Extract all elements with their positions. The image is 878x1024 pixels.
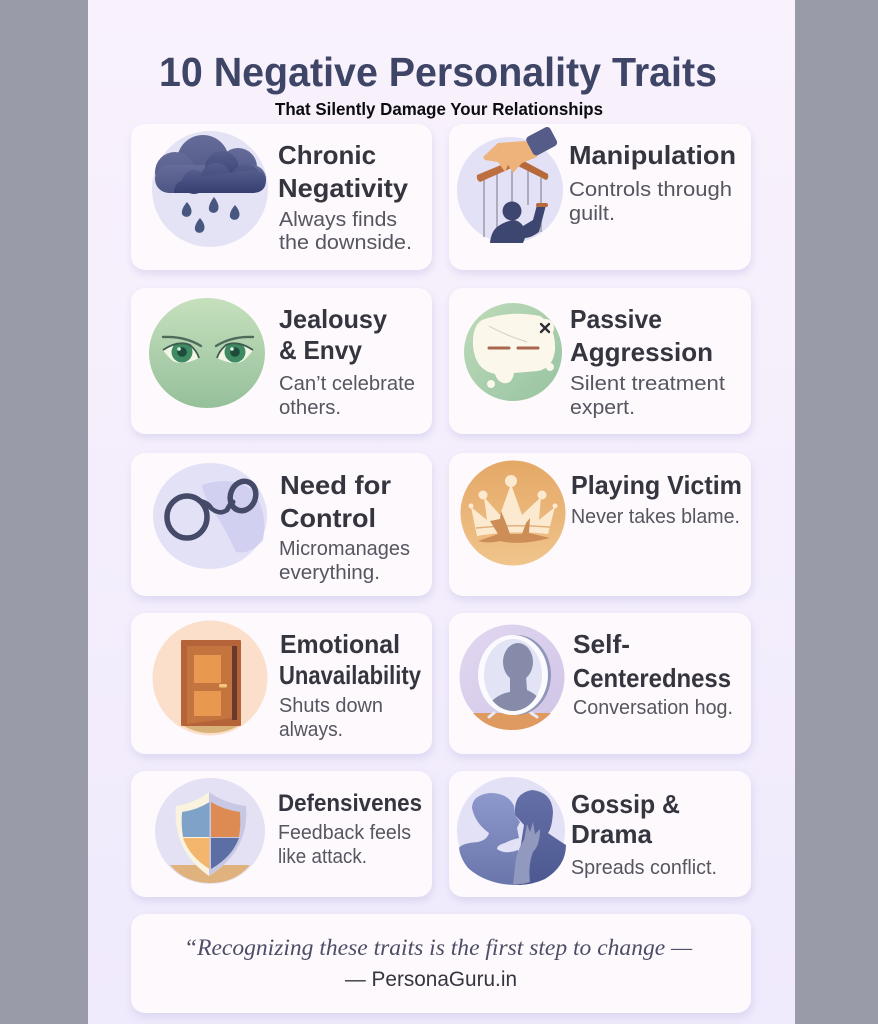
heading: Need for <box>280 470 391 500</box>
description: Silent treatment <box>570 372 725 395</box>
heading: Centeredness <box>573 663 731 693</box>
description <box>570 372 725 419</box>
icon: mirror with silhouette <box>460 624 564 730</box>
heading <box>570 304 713 367</box>
description: others. <box>279 396 341 419</box>
description <box>279 694 383 741</box>
panel: self-centeredness <box>449 613 751 754</box>
icon: closed door <box>152 620 268 736</box>
description: Spreads conflict. <box>571 856 717 879</box>
heading <box>571 789 680 849</box>
icon: shield <box>155 778 265 884</box>
description: Never takes blame. <box>571 505 740 528</box>
description: Micromanages <box>279 537 410 560</box>
heading: Jealousy <box>279 304 388 334</box>
heading: Defensivenes <box>278 790 422 817</box>
heading: Manipulation <box>569 140 736 170</box>
heading <box>279 304 388 365</box>
card <box>131 613 432 754</box>
description <box>279 208 412 254</box>
heading: Control <box>280 503 376 533</box>
description <box>569 178 732 225</box>
description: guilt. <box>569 202 615 225</box>
icon: puppet strings <box>457 126 563 243</box>
description: everything. <box>279 561 380 584</box>
card <box>131 288 432 434</box>
heading: Negativity <box>278 173 409 203</box>
panel: emotional unavailability <box>131 613 432 754</box>
heading: Passive <box>570 304 662 334</box>
icon: broken crown <box>460 460 566 566</box>
panel: jealousy and envy <box>131 288 432 434</box>
heading: Self- <box>573 629 630 659</box>
description: Controls through <box>569 178 732 201</box>
panel: playing victim <box>449 453 751 596</box>
description: Always finds <box>279 208 397 231</box>
card <box>449 613 751 754</box>
panel: gossip and drama <box>449 771 751 897</box>
panel: manipulation <box>449 124 751 270</box>
heading <box>280 470 391 533</box>
description: always. <box>279 718 343 741</box>
card <box>449 288 751 434</box>
heading <box>279 629 421 690</box>
panel: closing quote <box>131 914 751 1013</box>
icon: envious green eyes <box>149 298 265 408</box>
description <box>279 372 415 419</box>
panel: need for control <box>131 453 432 596</box>
heading: Playing Victim <box>571 470 742 500</box>
description: like attack. <box>278 845 367 868</box>
card <box>131 453 432 596</box>
icon: silent speech bubble <box>464 303 562 401</box>
card <box>449 771 751 897</box>
panel: passive aggression <box>449 288 751 434</box>
icon: two silhouettes whispering <box>457 777 566 885</box>
panel: chronic negativity <box>131 124 432 270</box>
heading: Drama <box>571 819 653 849</box>
description: Feedback feels <box>278 821 411 844</box>
description: Conversation hog. <box>573 696 733 719</box>
panel: defensiveness <box>131 771 432 897</box>
card <box>449 453 751 596</box>
card <box>131 771 432 897</box>
subtitle: That Silently Damage Your Relationships <box>275 99 603 119</box>
description: expert. <box>570 396 635 419</box>
heading: Emotional <box>280 629 400 659</box>
description <box>279 537 410 584</box>
icon: rain cloud <box>152 131 268 247</box>
heading: & Envy <box>279 335 362 365</box>
quote: “Recognizing these traits is the first step to change — <box>184 935 693 960</box>
card <box>131 914 751 1013</box>
description <box>278 821 411 868</box>
description: Shuts down <box>279 694 383 717</box>
heading: Gossip & <box>571 789 680 819</box>
heading: Unavailability <box>279 660 421 690</box>
title: 10 Negative Personality Traits <box>159 49 717 95</box>
icon: handcuffs <box>153 463 267 569</box>
card <box>131 124 432 270</box>
attribution: — PersonaGuru.in <box>345 968 517 991</box>
description: the downside. <box>279 231 412 254</box>
heading <box>573 629 731 693</box>
heading <box>278 140 409 203</box>
card <box>449 124 751 270</box>
heading: Chronic <box>278 140 376 170</box>
heading: Aggression <box>570 337 713 367</box>
description: Can’t celebrate <box>279 372 415 395</box>
